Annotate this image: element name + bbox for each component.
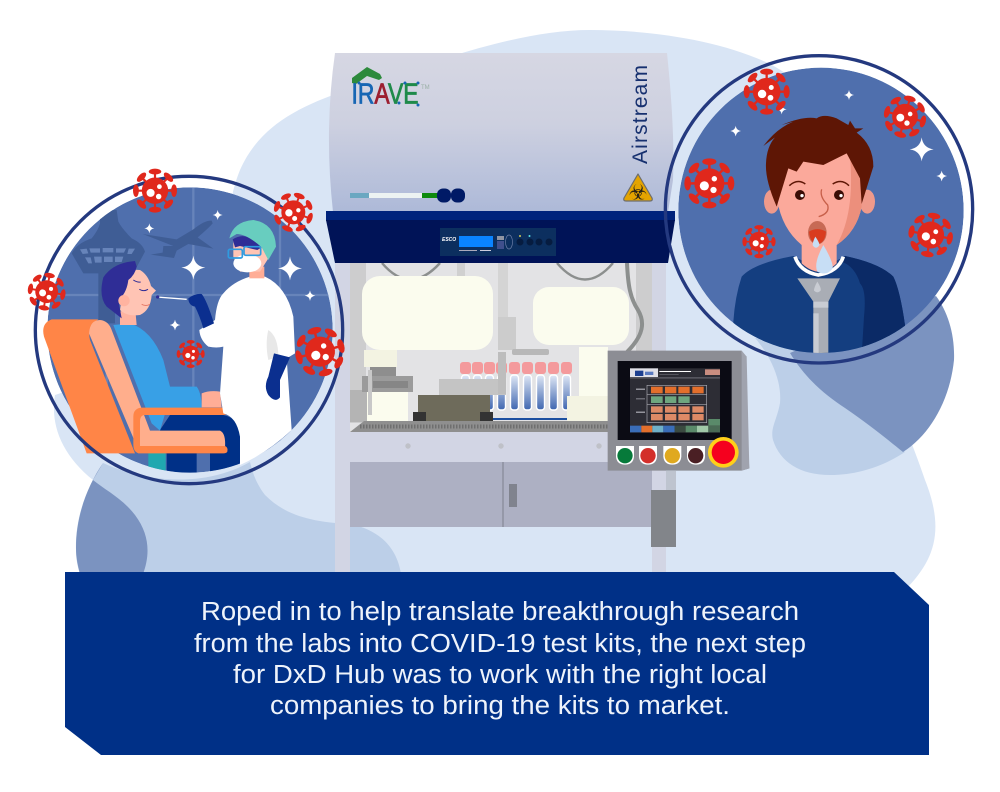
virus particles (25, 169, 351, 382)
shirt (113, 323, 202, 431)
lab equipment (350, 317, 608, 422)
sparkles (730, 90, 947, 181)
text banner (65, 572, 929, 755)
chair back (43, 319, 135, 453)
patient head (101, 261, 156, 325)
ring (665, 56, 973, 363)
Airstream label: Airstream (629, 65, 652, 164)
chair cushion (89, 320, 225, 447)
right illustration: saliva sample (665, 56, 973, 383)
banner text (194, 598, 806, 720)
indicator strip (350, 188, 465, 202)
biohazard sign (624, 174, 652, 204)
legs (148, 415, 240, 476)
doctor coat (199, 277, 295, 465)
aeroplane (143, 221, 213, 258)
control display (440, 228, 556, 256)
control buttons (616, 437, 739, 468)
centre pipe (456, 263, 466, 295)
collection funnel (797, 278, 840, 355)
cabinet doors (350, 443, 652, 527)
hoses (382, 263, 642, 352)
cream windows (362, 276, 629, 350)
jacket (733, 256, 905, 353)
hood front band (326, 211, 675, 263)
hair (763, 116, 873, 207)
coat shadow (267, 330, 278, 360)
banner text: for DxD Hub was to work with the right local (233, 661, 767, 689)
IRAVE logo: IRAVE (352, 78, 418, 110)
sample tubes (460, 362, 572, 420)
jacket shade (843, 256, 905, 347)
chair arm (133, 408, 228, 453)
control display: ESCO (442, 237, 456, 243)
swab (156, 295, 187, 299)
background blobs (54, 30, 954, 600)
touchscreen control panel (608, 351, 749, 471)
sparkles (144, 210, 315, 330)
cabinet frame and legs (335, 262, 666, 573)
left illustration: nasal swab test (25, 169, 351, 484)
scene (678, 68, 964, 383)
ring (35, 176, 343, 484)
biohazard sign: ☣ (629, 180, 647, 204)
saliva drops (813, 237, 833, 274)
work surface grate (350, 421, 612, 432)
ears (764, 190, 875, 214)
side leg bracket (651, 471, 676, 547)
scene background (40, 180, 340, 476)
face (777, 150, 862, 249)
mouth (808, 221, 827, 244)
IRAVE logo: TM (421, 85, 430, 91)
screen (618, 361, 732, 440)
face shade (837, 157, 862, 245)
gloves (188, 294, 290, 400)
banner text: from the labs into COVID-19 test kits, the next step (194, 630, 806, 658)
hands (202, 391, 222, 407)
virus particles (684, 69, 957, 261)
doctor head (228, 220, 276, 278)
control tower (72, 210, 145, 323)
biosafety cabinet machine (326, 53, 676, 573)
hood (329, 53, 673, 212)
banner text: Roped in to help translate breakthrough research (201, 598, 799, 626)
banner text: companies to bring the kits to market. (270, 692, 730, 720)
collar and neck (795, 240, 843, 275)
eyes and brows (789, 182, 849, 217)
